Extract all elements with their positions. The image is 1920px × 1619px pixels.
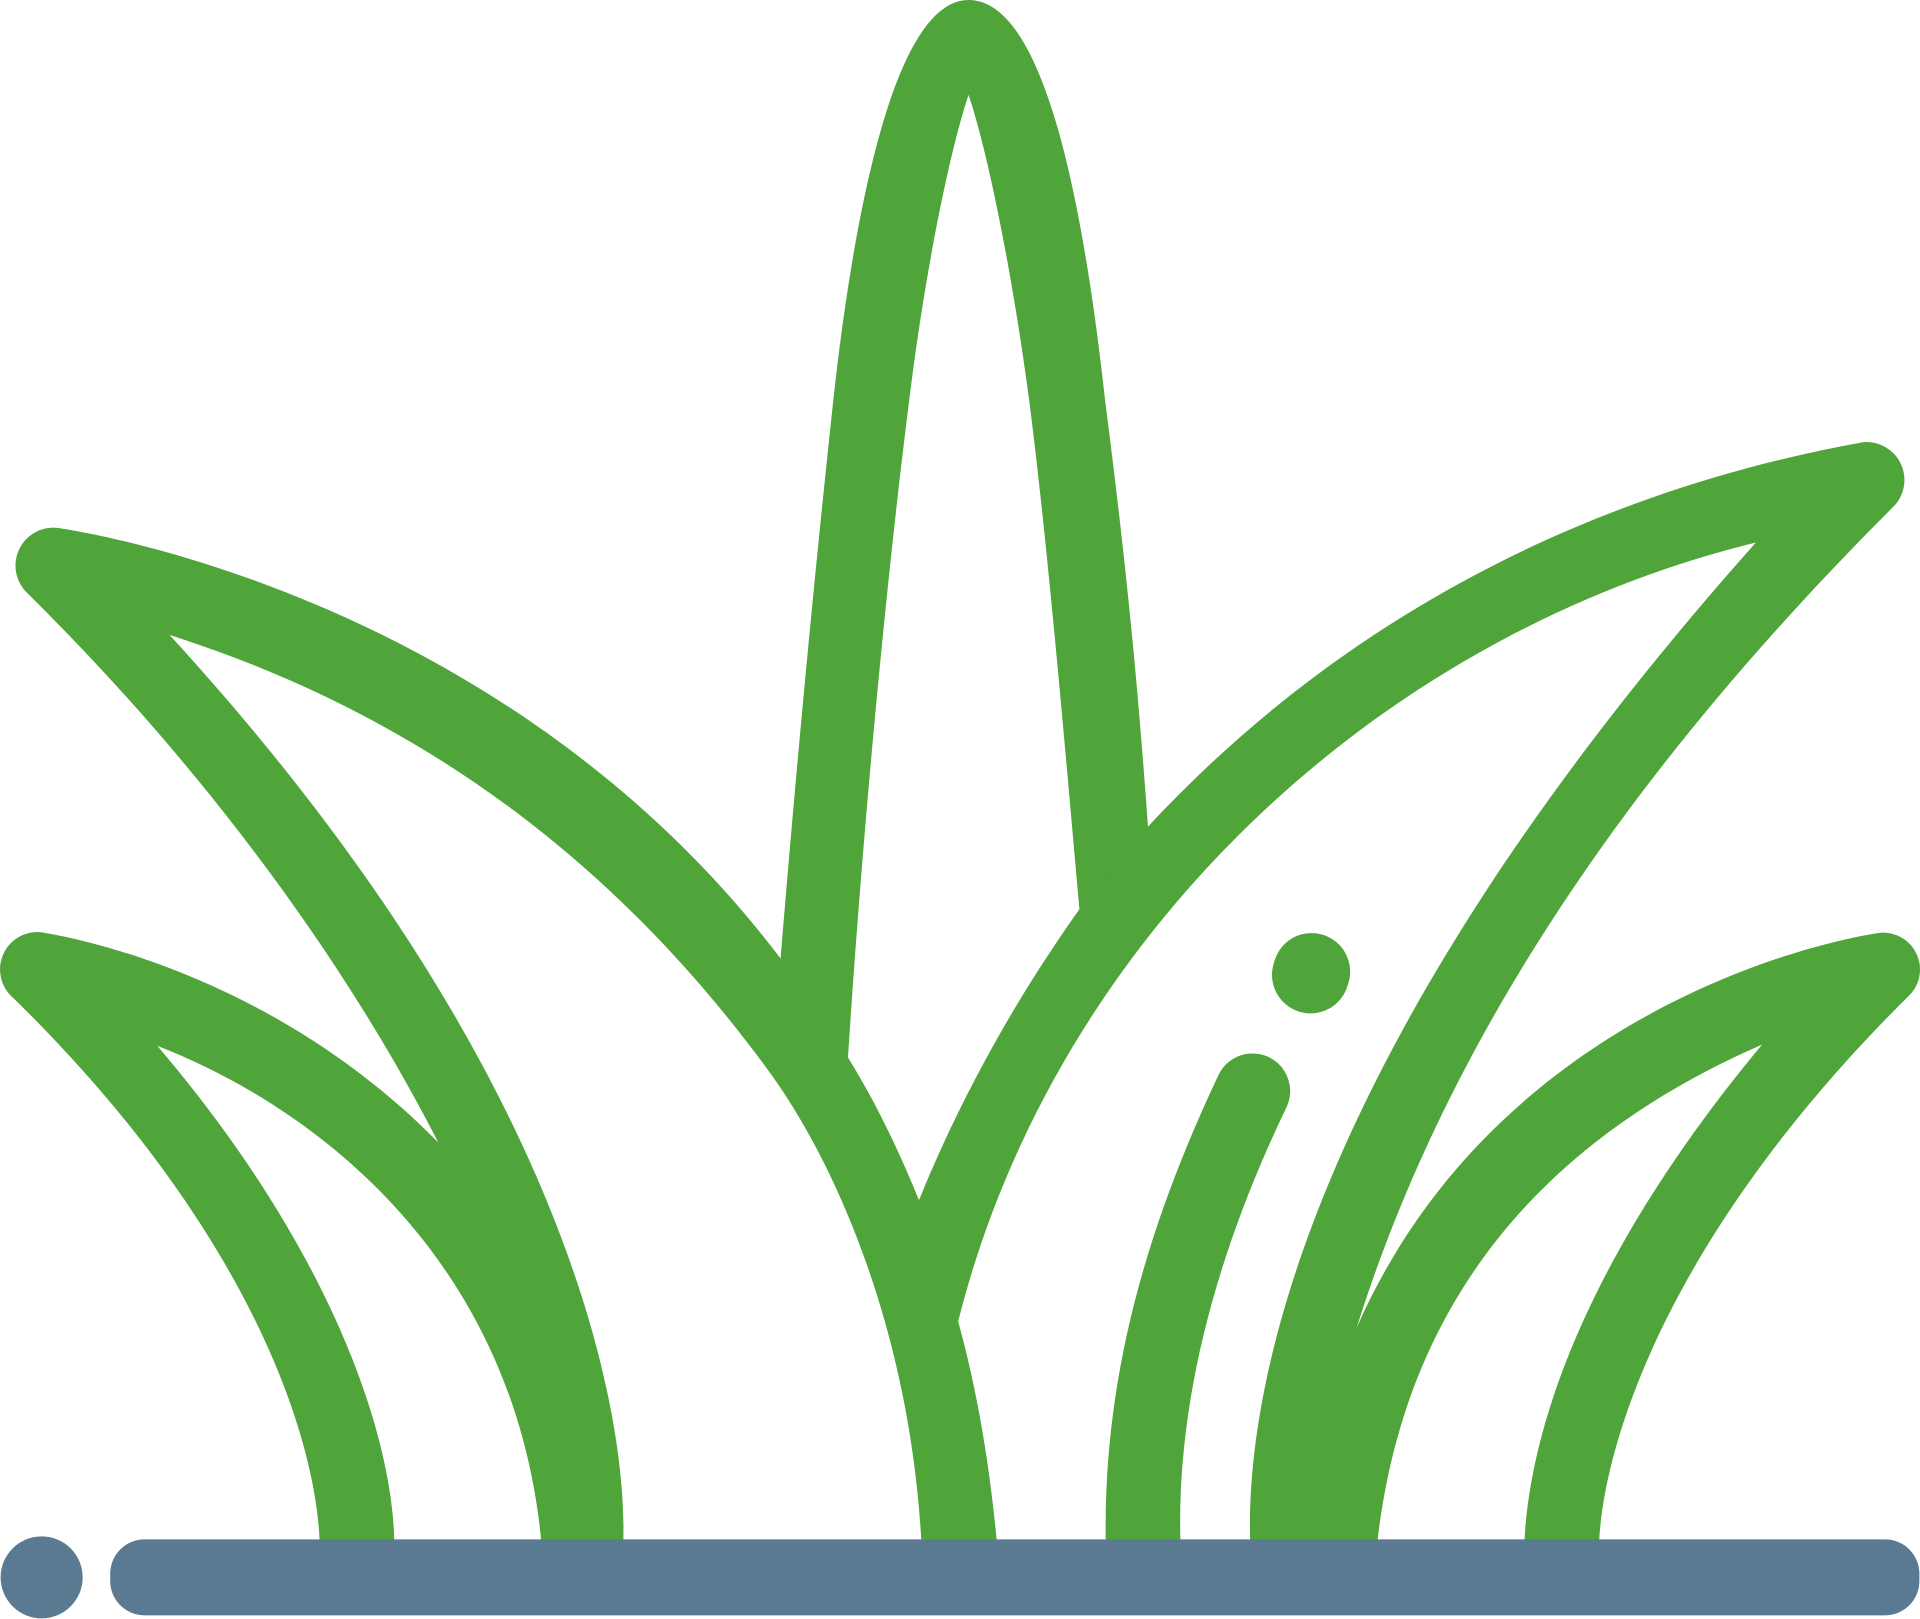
dot: above stem [1279, 972, 1343, 975]
blade: small right [1298, 933, 1920, 1541]
blade: short inner stem [1106, 1053, 1290, 1541]
blade: small left [0, 932, 623, 1541]
blade: centre [781, 0, 1157, 1057]
ground line [1, 1536, 1919, 1618]
ground dot [1, 1536, 83, 1618]
blade: large right [919, 442, 1904, 1541]
blade: large left [15, 528, 997, 1541]
ground bar [110, 1539, 1919, 1615]
